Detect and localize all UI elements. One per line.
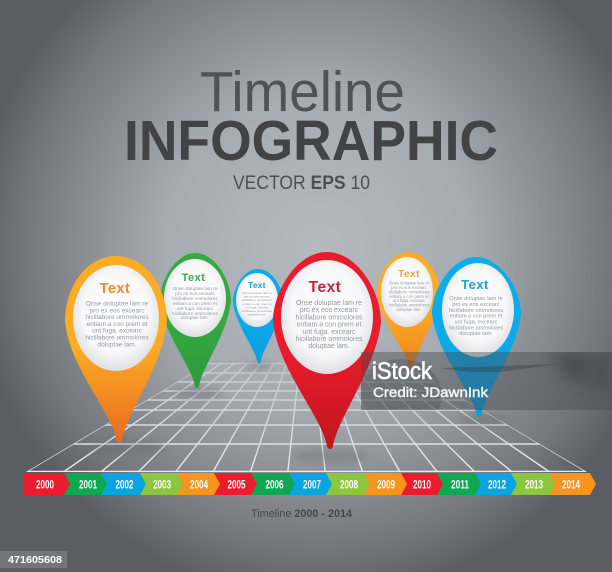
pin: red: hicillabore ommolores — [295, 314, 363, 321]
pin: orange large: unt fuga. excearc — [92, 328, 143, 335]
pin: orange small: unt fuga. excearc — [393, 298, 425, 303]
title: Timeline — [200, 60, 405, 124]
timeline bar — [24, 473, 596, 495]
pin: green: doluptae lam. — [181, 315, 209, 320]
pin: green: entiam a con prem et — [173, 301, 218, 306]
timeline bar: 2005 — [228, 480, 246, 492]
pin: orange large: Onse doluptae lam re — [86, 300, 148, 308]
timeline bar: 2000 — [36, 480, 54, 492]
timeline bar: 2001 — [79, 480, 97, 492]
title: INFOGRAPHIC — [124, 109, 498, 173]
pin: blue small: pro ex eos excearc — [244, 295, 271, 299]
pin: orange small: hicillabore ommolores — [389, 289, 429, 294]
pin: orange large: hicillabore ommolores — [85, 314, 149, 321]
pin: blue small: hicillabore ommolores — [242, 298, 272, 302]
watermark: iStock — [372, 358, 433, 385]
pin: red: hicillabore ommolores — [295, 336, 363, 343]
timeline bar: 2002 — [116, 480, 134, 492]
timeline bar: 2011 — [451, 480, 469, 492]
pin: orange small: pro ex eos excearc — [391, 285, 427, 290]
pin: red: unt fuga. excearc — [303, 329, 356, 336]
pin: green: hicillabore ommolores — [172, 296, 218, 301]
timeline bar: 2006 — [266, 480, 284, 492]
pin: blue small — [233, 269, 283, 364]
pin: orange small: doluptae lam. — [396, 307, 422, 312]
pin: green: pro ex eos excearc — [175, 291, 215, 296]
timeline bar: 2010 — [413, 480, 431, 492]
timeline bar: 2008 — [340, 480, 358, 492]
pin: orange large: pro ex eos excearc — [90, 307, 145, 314]
pin: red: doluptae lam. — [308, 343, 350, 350]
timeline bar: 2014 — [562, 480, 580, 492]
title — [124, 60, 498, 194]
pin: red — [273, 252, 381, 449]
pin: green: Text — [182, 272, 205, 284]
timeline bar: 2007 — [303, 480, 321, 492]
pin: orange large: entiam a con prem et — [86, 321, 148, 328]
pin: red: Text — [309, 279, 341, 296]
pin: orange small: entiam a con prem et — [389, 294, 430, 299]
pin: orange large: hicillabore ommolores — [85, 334, 149, 342]
pin: orange large: Text — [100, 281, 130, 297]
image id — [0, 551, 67, 568]
pin: blue small: hicillabore ommolores — [242, 309, 272, 313]
watermark — [361, 352, 612, 410]
timeline bar: 2004 — [190, 480, 208, 492]
pin: blue large: pro ex eos excearc — [452, 302, 500, 308]
pin: blue large: hicillabore ommolores — [449, 308, 503, 314]
pin: orange small: Text — [398, 269, 420, 280]
timeline bar: 2013 — [525, 480, 543, 492]
timeline bar: 2009 — [377, 480, 395, 492]
pin: orange small — [377, 252, 440, 369]
pin: orange small: Onse doluptae lam re — [389, 280, 430, 286]
pin: blue small: entiam a con prem et — [242, 302, 272, 306]
pin: blue large: doluptae lam. — [459, 331, 493, 337]
title: VECTOR EPS 10 — [233, 172, 370, 194]
pin: orange large: doluptae lam. — [97, 341, 137, 348]
pin: green: unt fuga. excearc — [177, 306, 214, 311]
pin: green: hicillabore ommolores — [172, 311, 218, 316]
pin: orange large — [65, 256, 167, 442]
pin: green — [160, 253, 231, 388]
pin: blue small: Text — [248, 281, 266, 290]
pin: green: Onse doluptae lam re — [173, 286, 218, 291]
timeline bar: 2012 — [488, 480, 506, 492]
caption: Timeline 2000 - 2014 — [251, 508, 353, 520]
pin: blue large: unt fuga. excearc — [455, 320, 498, 326]
image id: 471605608 — [8, 554, 62, 566]
pin: red: entiam a con prem et — [297, 322, 361, 329]
timeline bar: 2003 — [153, 480, 171, 492]
pin: blue large: hicillabore ommolores — [449, 325, 503, 331]
pin: blue small: unt fuga. excearc — [245, 305, 269, 309]
pin: blue large: entiam a con prem et — [450, 314, 503, 320]
pin: blue large — [432, 257, 521, 417]
pin shadows — [94, 363, 508, 463]
pin: red: pro ex eos excearc — [300, 307, 359, 314]
pin: blue large: Onse doluptae lam re — [449, 296, 503, 302]
pin: blue small: doluptae lam. — [248, 313, 266, 317]
perspective grid floor — [26, 363, 587, 472]
pin: blue small: Onse doluptae lam re — [242, 291, 272, 295]
pin: red: Onse doluptae lam re — [296, 300, 362, 307]
pin: blue large: Text — [461, 277, 489, 292]
watermark: Credit: JDawnInk — [373, 384, 489, 400]
pin: orange small: hicillabore ommolores — [389, 303, 429, 308]
